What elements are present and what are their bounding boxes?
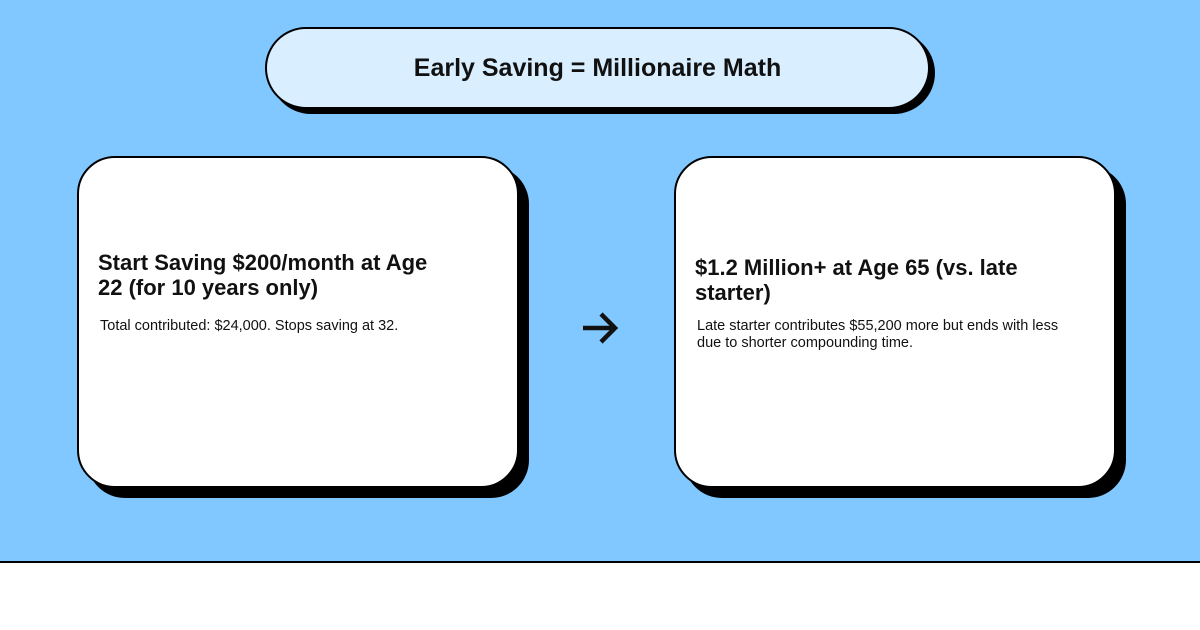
panel: early saver	[77, 156, 519, 488]
arrow	[583, 312, 618, 344]
title	[265, 27, 930, 109]
text: result details: Late starter contributes $55,200 more but ends with less due to shorter compounding time.	[697, 318, 1058, 351]
heading: result: $1.2 Million+ at Age 65 (vs. late starter)	[695, 255, 1018, 305]
title: Early Saving = Millionaire Math	[414, 54, 781, 82]
text: early saver details: Total contributed: $24,000. Stops saving at 32.	[100, 318, 398, 334]
heading: early saver: Start Saving $200/month at Age 22 (for 10 years only)	[98, 250, 427, 300]
panel: result	[674, 156, 1116, 488]
